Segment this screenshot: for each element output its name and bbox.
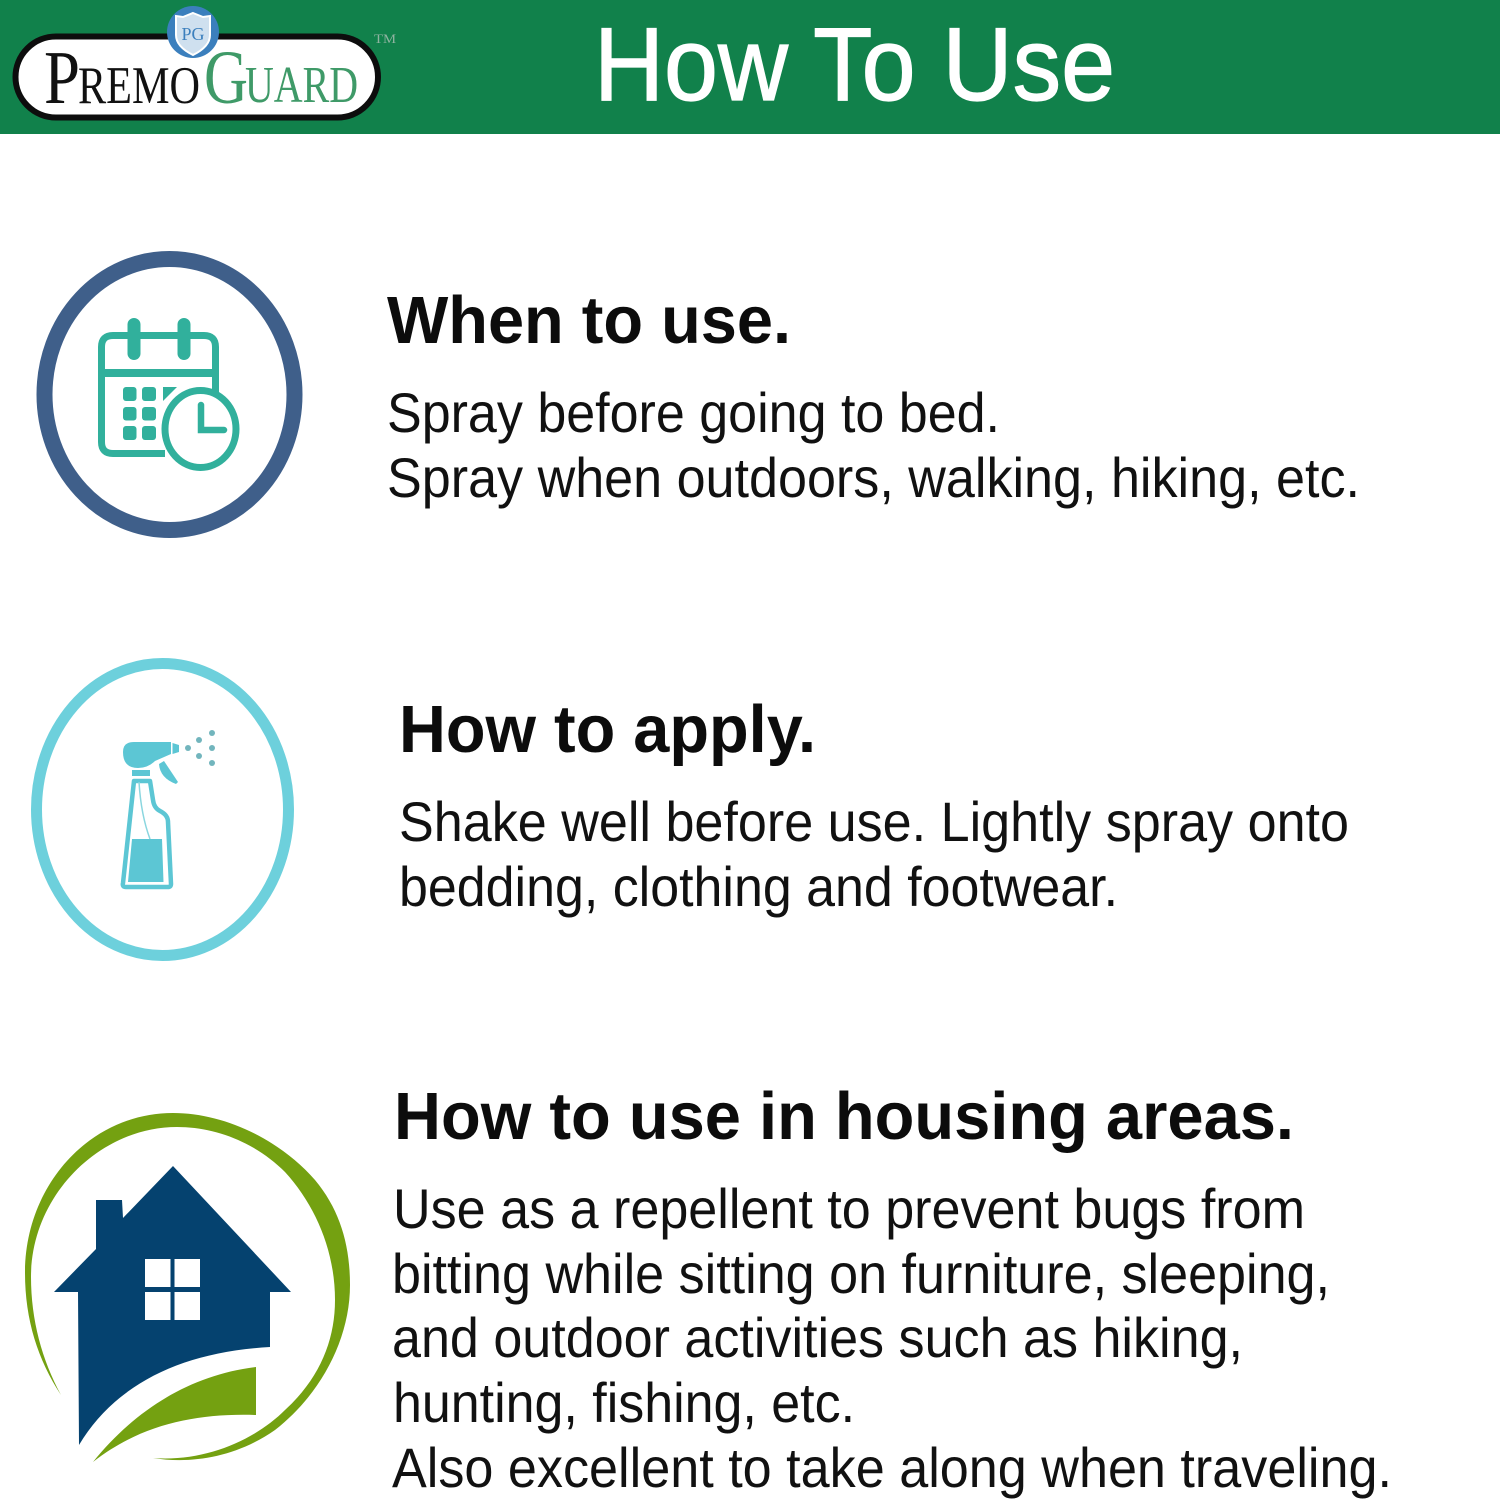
text block: Spray when outdoors, walking, hiking, etc. [387,446,1360,509]
text block: bedding, clothing and footwear. [399,855,1118,918]
icon: house in green swoosh [25,1113,350,1462]
icon: spray bottle [36,664,288,956]
title: How To Use [594,7,1115,123]
heading: When to use. [387,283,791,358]
logo shield badge: PG [181,24,205,44]
text block: Spray before going to bed. [387,381,1000,444]
text block: and outdoor activities such as hiking, [392,1306,1243,1369]
trademark mark: TM [374,31,396,46]
icon: calendar and clock [44,259,294,530]
logo wordmark: UARD [245,57,358,114]
logo wordmark: P [44,36,80,120]
text block [392,1177,1392,1499]
text block: bitting while sitting on furniture, sleeping, [392,1242,1330,1305]
heading: How to apply. [399,692,816,767]
logo: PremoGuard [16,6,396,120]
text block: Also excellent to take along when traveling. [392,1436,1392,1499]
text block: Shake well before use. Lightly spray onto [399,790,1349,853]
panel: when to use [44,259,1360,530]
logo shield badge [167,6,219,58]
header banner [0,0,1500,134]
text block [399,790,1349,918]
text block: Use as a repellent to prevent bugs from [393,1177,1305,1240]
text block: hunting, fishing, etc. [393,1371,855,1434]
panel: how to apply [36,664,1349,956]
logo wordmark [44,36,358,120]
panel: how to use in housing areas [25,1079,1392,1499]
heading: How to use in housing areas. [394,1079,1294,1154]
logo wordmark: REMO [78,57,200,115]
logo wordmark: G [204,36,248,120]
text block [387,381,1360,509]
